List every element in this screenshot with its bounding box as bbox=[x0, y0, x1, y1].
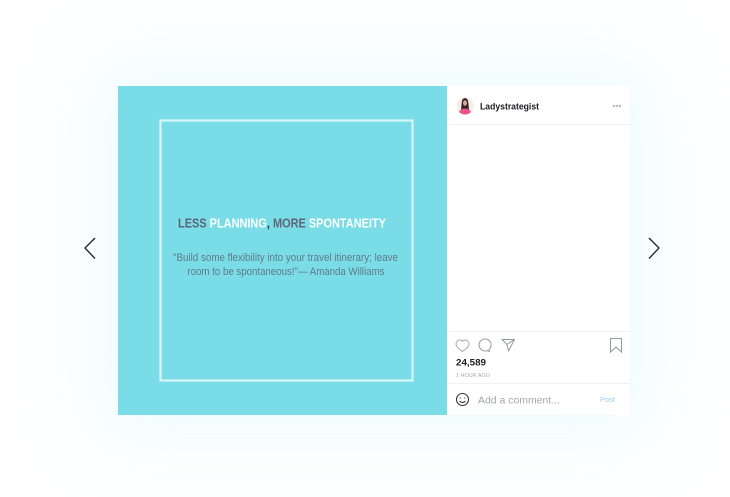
timestamp: 1 HOUR AGO bbox=[456, 373, 491, 379]
background glow bbox=[118, 86, 630, 415]
like count: 24,589 bbox=[456, 358, 486, 368]
icon: bookmark bbox=[610, 338, 622, 352]
icon: smiley bbox=[456, 394, 468, 406]
action divider bbox=[447, 331, 630, 332]
icon: profile avatar bbox=[456, 98, 474, 114]
post button: Post bbox=[600, 395, 616, 404]
username: Ladystrategist bbox=[480, 102, 540, 112]
panel: post sidebar bbox=[447, 86, 630, 415]
comment placeholder: Add a comment... bbox=[478, 394, 560, 406]
quote text bbox=[173, 252, 398, 278]
heading: LESS PLANNING, MORE SPONTANEITY bbox=[178, 216, 387, 230]
header divider bbox=[447, 124, 630, 125]
arrow: next bbox=[649, 238, 659, 258]
frame bbox=[160, 120, 412, 380]
quote text: "Build some flexibility into your travel itinerary; leave bbox=[173, 252, 398, 264]
panel: quote image bbox=[118, 86, 447, 415]
icon: more options bbox=[613, 105, 621, 107]
comment divider bbox=[447, 383, 630, 384]
icon: comment bbox=[479, 339, 491, 352]
icon: share bbox=[502, 340, 514, 351]
arrow: previous bbox=[85, 238, 95, 258]
quote text: room to be spontaneous!"— Amanda Williams bbox=[188, 266, 384, 278]
icon: heart bbox=[456, 340, 469, 352]
